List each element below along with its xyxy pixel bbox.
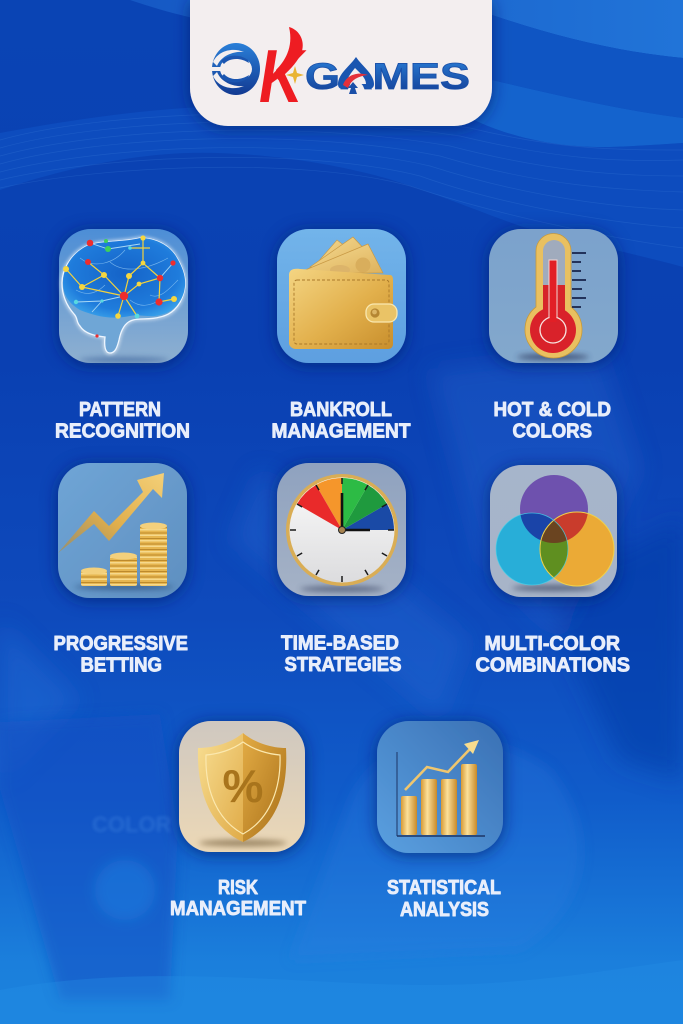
label: statistical analysis: ANALYSIS: [400, 898, 489, 921]
label: multi-color combinations: COMBINATIONS: [476, 654, 630, 676]
card: risk management: [170, 721, 306, 920]
label: bankroll management: BANKROLL: [290, 398, 392, 421]
icon: thermometer: [489, 229, 618, 363]
label: bankroll management: MANAGEMENT: [272, 420, 411, 442]
logo text: OK GAMES: K: [259, 34, 307, 119]
label: time-based strategies: STRATEGIES: [284, 653, 402, 676]
icon: clock: [277, 463, 406, 596]
label: hot and cold colors: HOT & COLD: [494, 398, 611, 421]
label: statistical analysis: STATISTICAL: [387, 876, 501, 899]
card: bankroll management: [272, 229, 411, 442]
label: pattern recognition: RECOGNITION: [55, 420, 190, 442]
logo spade: [338, 57, 374, 94]
icon: brain: [59, 229, 188, 363]
card: statistical analysis: [377, 721, 503, 921]
label: progressive betting: [54, 632, 188, 676]
label: risk management: [170, 876, 306, 920]
card: pattern recognition: [55, 229, 190, 442]
logo text: OK GAMES: [259, 27, 470, 119]
label: progressive betting: PROGRESSIVE: [54, 632, 188, 655]
faint background text: COLOR: [92, 812, 172, 837]
card: progressive betting: [54, 463, 188, 676]
label: bankroll management: [272, 398, 411, 442]
card: hot and cold colors: [489, 229, 618, 442]
icon: rising arrow and coins: [58, 463, 187, 598]
percent sign: %: [223, 760, 263, 812]
icon: shield: [179, 721, 305, 852]
icon: venn circles: [490, 465, 617, 597]
label: risk management: MANAGEMENT: [170, 897, 306, 920]
label: progressive betting: BETTING: [80, 654, 162, 676]
logo mark: O ring: [212, 43, 260, 95]
label: hot and cold colors: COLORS: [512, 420, 592, 442]
label: hot and cold colors: [494, 398, 611, 442]
label: statistical analysis: [387, 876, 501, 921]
logo text: OK GAMES: GAMES: [305, 56, 470, 97]
card: time-based strategies: [277, 463, 406, 676]
label: risk management: RISK: [218, 876, 258, 899]
label: multi-color combinations: MULTI-COLOR: [484, 632, 620, 655]
icon: wallet: [277, 229, 406, 363]
label: pattern recognition: PATTERN: [79, 398, 161, 421]
label: multi-color combinations: [476, 632, 630, 676]
label: time-based strategies: TIME-BASED: [281, 632, 399, 654]
card: multi-color combinations: [476, 465, 630, 676]
icon: bar chart with arrow: [377, 721, 503, 853]
logo panel: [190, 0, 492, 126]
label: time-based strategies: [281, 632, 402, 676]
label: pattern recognition: [55, 398, 190, 442]
